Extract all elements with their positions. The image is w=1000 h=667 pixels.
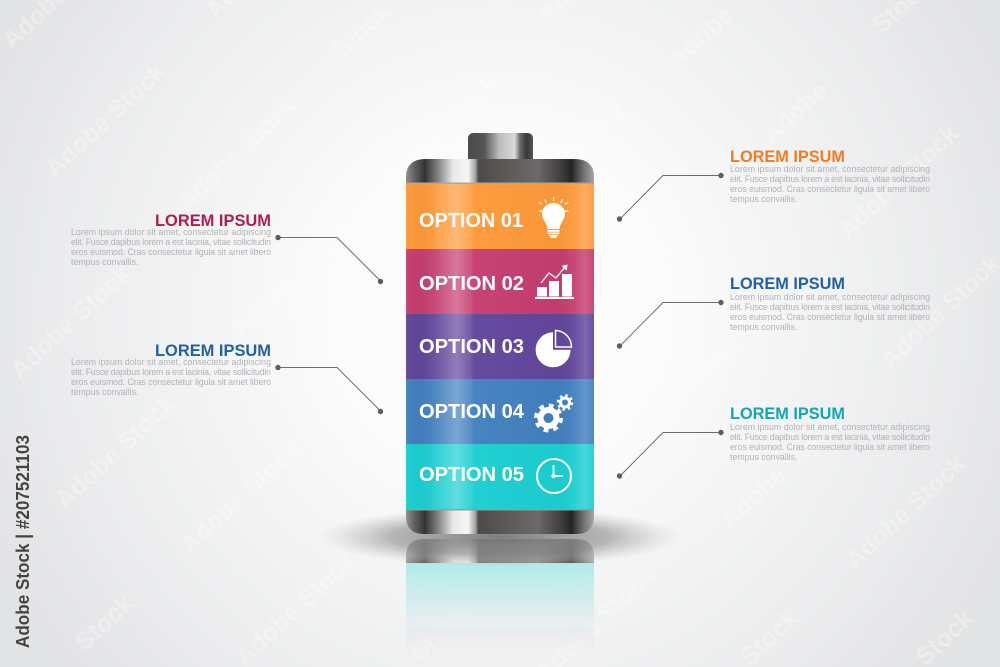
callout: left 2: eros euismod. Cras consectetur ligula sit amet libero (71, 377, 271, 387)
label: option 03: OPTION 03 (419, 336, 524, 358)
battery reflection (406, 539, 594, 662)
watermarks: Stock (563, 97, 632, 164)
watermarks: Adobe Stock (833, 120, 964, 244)
callout: right 3 (617, 404, 930, 479)
battery cap (468, 133, 533, 160)
watermarks: Adobe (757, 76, 833, 149)
callout: right 1: elit. Fusce dapibus lorem a est lacinia, vitae sollicitudin (730, 174, 930, 184)
callout: right 1: eros euismod. Cras consectetur ligula sit amet libero (730, 184, 930, 194)
callout: left 2: tempus convallis. (71, 387, 138, 397)
icon: gears (536, 396, 572, 430)
watermarks: Adobe Stock (373, 70, 504, 194)
callout: right 3: LOREM IPSUM (730, 404, 845, 423)
icon: pie chart (536, 330, 572, 367)
watermarks: Stock (405, 599, 474, 666)
callout: left 1 (71, 211, 383, 284)
watermarks: Adobe Stock (557, 225, 688, 349)
ground shadow (318, 507, 682, 567)
watermarks: Adobe Stock (172, 92, 303, 216)
watermarks: Stock (500, 497, 569, 564)
callout: right 3: tempus convallis. (730, 452, 797, 462)
label: option 02: OPTION 02 (419, 273, 524, 295)
watermarks: Adobe (345, 316, 421, 389)
callout: left 1: tempus convallis. (71, 257, 138, 267)
callout: right 2: Lorem ipsum dolor sit amet, consectetur adipiscing (730, 292, 930, 302)
watermarks: Adobe (663, 1, 739, 74)
callout: right 1: tempus convallis. (730, 194, 797, 204)
icon: clock (537, 459, 571, 493)
callout: left 2: elit. Fusce dapibus lorem a est lacinia, vitae sollicitudin (71, 367, 271, 377)
callout: right 1: LOREM IPSUM (730, 147, 845, 166)
band: option 02 (406, 249, 594, 314)
label: option 01: OPTION 01 (419, 210, 523, 232)
callout: left 1: LOREM IPSUM (155, 211, 271, 230)
callout: right 1: Lorem ipsum dolor sit amet, consectetur adipiscing (730, 164, 930, 174)
icon: bar chart with arrow (535, 264, 574, 299)
watermarks: Adobe Stock (175, 435, 306, 559)
label: option 05: OPTION 05 (419, 464, 524, 486)
bottom metal band (406, 509, 594, 534)
callout: right 2 (617, 274, 930, 349)
callout: left 1: eros euismod. Cras consectetur ligula sit amet libero (71, 247, 271, 257)
watermarks: Adobe Stock (50, 390, 181, 514)
callout: left 2: Lorem ipsum dolor sit amet, consectetur adipiscing (71, 357, 271, 367)
callout: right 2: tempus convallis. (730, 322, 797, 332)
icon: light bulb (538, 197, 569, 238)
band: option 03 (406, 314, 594, 379)
callout: left 1: Lorem ipsum dolor sit amet, consectetur adipiscing (71, 227, 271, 237)
label: option 04: OPTION 04 (419, 401, 525, 423)
callout: left 2 (71, 341, 383, 414)
callout: right 2: LOREM IPSUM (730, 274, 845, 293)
watermarks: Adobe Stock (225, 218, 356, 342)
watermarks: Adobe Stock (40, 58, 171, 182)
callout: left 1: elit. Fusce dapibus lorem a est lacinia, vitae sollicitudin (71, 237, 271, 247)
callout: right 3: elit. Fusce dapibus lorem a est lacinia, vitae sollicitudin (730, 432, 930, 442)
callout: right 3: eros euismod. Cras consectetur ligula sit amet libero (730, 442, 930, 452)
callout: right 1 (617, 147, 930, 222)
band: option 01 (406, 184, 594, 249)
watermarks: Adobe Stock (840, 450, 971, 574)
band: option 05 (406, 444, 594, 509)
stock credit: Adobe Stock | #207521103 (13, 435, 33, 648)
battery (406, 133, 594, 534)
top metal band (406, 159, 594, 184)
band: option 04 (406, 379, 594, 444)
callout: right 3: Lorem ipsum dolor sit amet, consectetur adipiscing (730, 422, 930, 432)
callout: right 2: elit. Fusce dapibus lorem a est lacinia, vitae sollicitudin (730, 302, 930, 312)
watermarks: Stock (70, 589, 139, 656)
callout: right 2: eros euismod. Cras consectetur ligula sit amet libero (730, 312, 930, 322)
watermarks: Adobe Stock (715, 410, 846, 534)
watermarks: Adobe (670, 333, 746, 406)
watermarks: Adobe Stock (5, 260, 136, 384)
callout: left 2: LOREM IPSUM (155, 341, 271, 360)
